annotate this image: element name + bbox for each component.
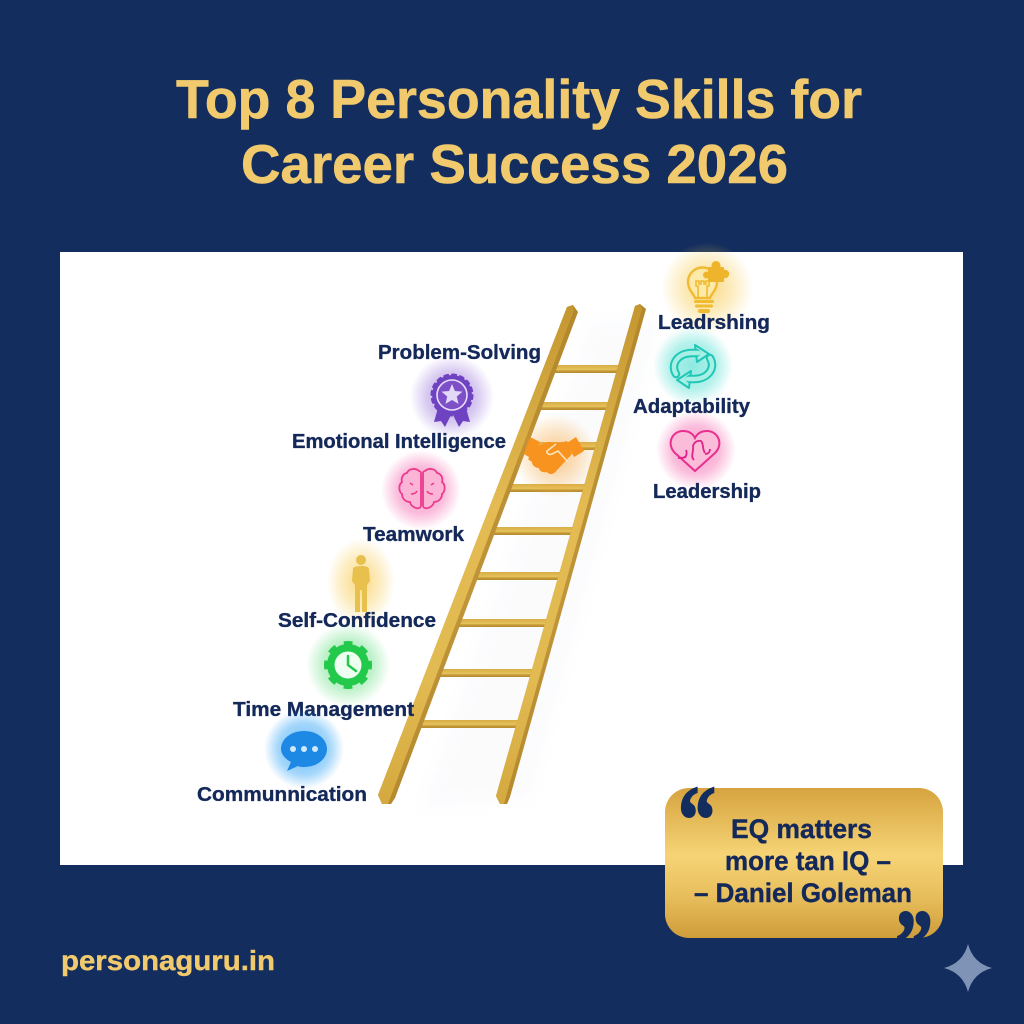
footer website: personaguru.in [61, 945, 275, 976]
callout: quote [665, 766, 943, 997]
icon: chat bubble [264, 709, 344, 789]
label: Teamwork [363, 524, 465, 546]
icon: gear with clock [306, 623, 390, 707]
icon: award ribbon badge [410, 355, 494, 439]
skill: Problem-Solving [378, 342, 541, 439]
ladder [378, 304, 660, 810]
label: Emotional Intelligence [292, 431, 506, 453]
quote text: – Daniel Goleman [694, 878, 912, 908]
icon: handshake [513, 414, 597, 498]
icon: four-point sparkle [944, 944, 992, 992]
skill: Emotional Intelligence [292, 431, 506, 530]
skill: Leadership [653, 410, 761, 503]
label: Adaptability [633, 396, 751, 418]
skill: Teamwork [363, 414, 597, 546]
quote text: EQ matters [731, 814, 872, 844]
icon: heart with head silhouette [656, 410, 736, 490]
closing quote mark: ” [895, 890, 933, 997]
label: Time Management [233, 699, 414, 721]
title: Career Success 2026 [241, 133, 788, 195]
skill: Self-Confidence [278, 538, 436, 632]
label: Self-Confidence [278, 610, 436, 632]
title: Top 8 Personality Skills for [176, 68, 862, 130]
title [176, 68, 862, 195]
label: Problem-Solving [378, 342, 541, 364]
quote text: more tan IQ – [725, 846, 891, 876]
label: Leadrshing [658, 312, 770, 334]
opening quote mark: “ [678, 766, 716, 873]
skill: Adaptability [633, 326, 751, 418]
icon: light bulb with puzzle piece [661, 242, 753, 334]
icon: standing person [327, 538, 395, 626]
panel: white ladder area [60, 252, 963, 865]
icon: cycle arrows [653, 326, 733, 406]
skill: Leadrshing [658, 242, 770, 334]
skill: Communnication [197, 709, 367, 806]
quote box [665, 788, 943, 938]
icon: brain [381, 450, 461, 530]
label: Communnication [197, 784, 367, 806]
skill: Time Management [233, 623, 414, 721]
quote text [694, 814, 912, 908]
label: Leadership [653, 481, 761, 503]
